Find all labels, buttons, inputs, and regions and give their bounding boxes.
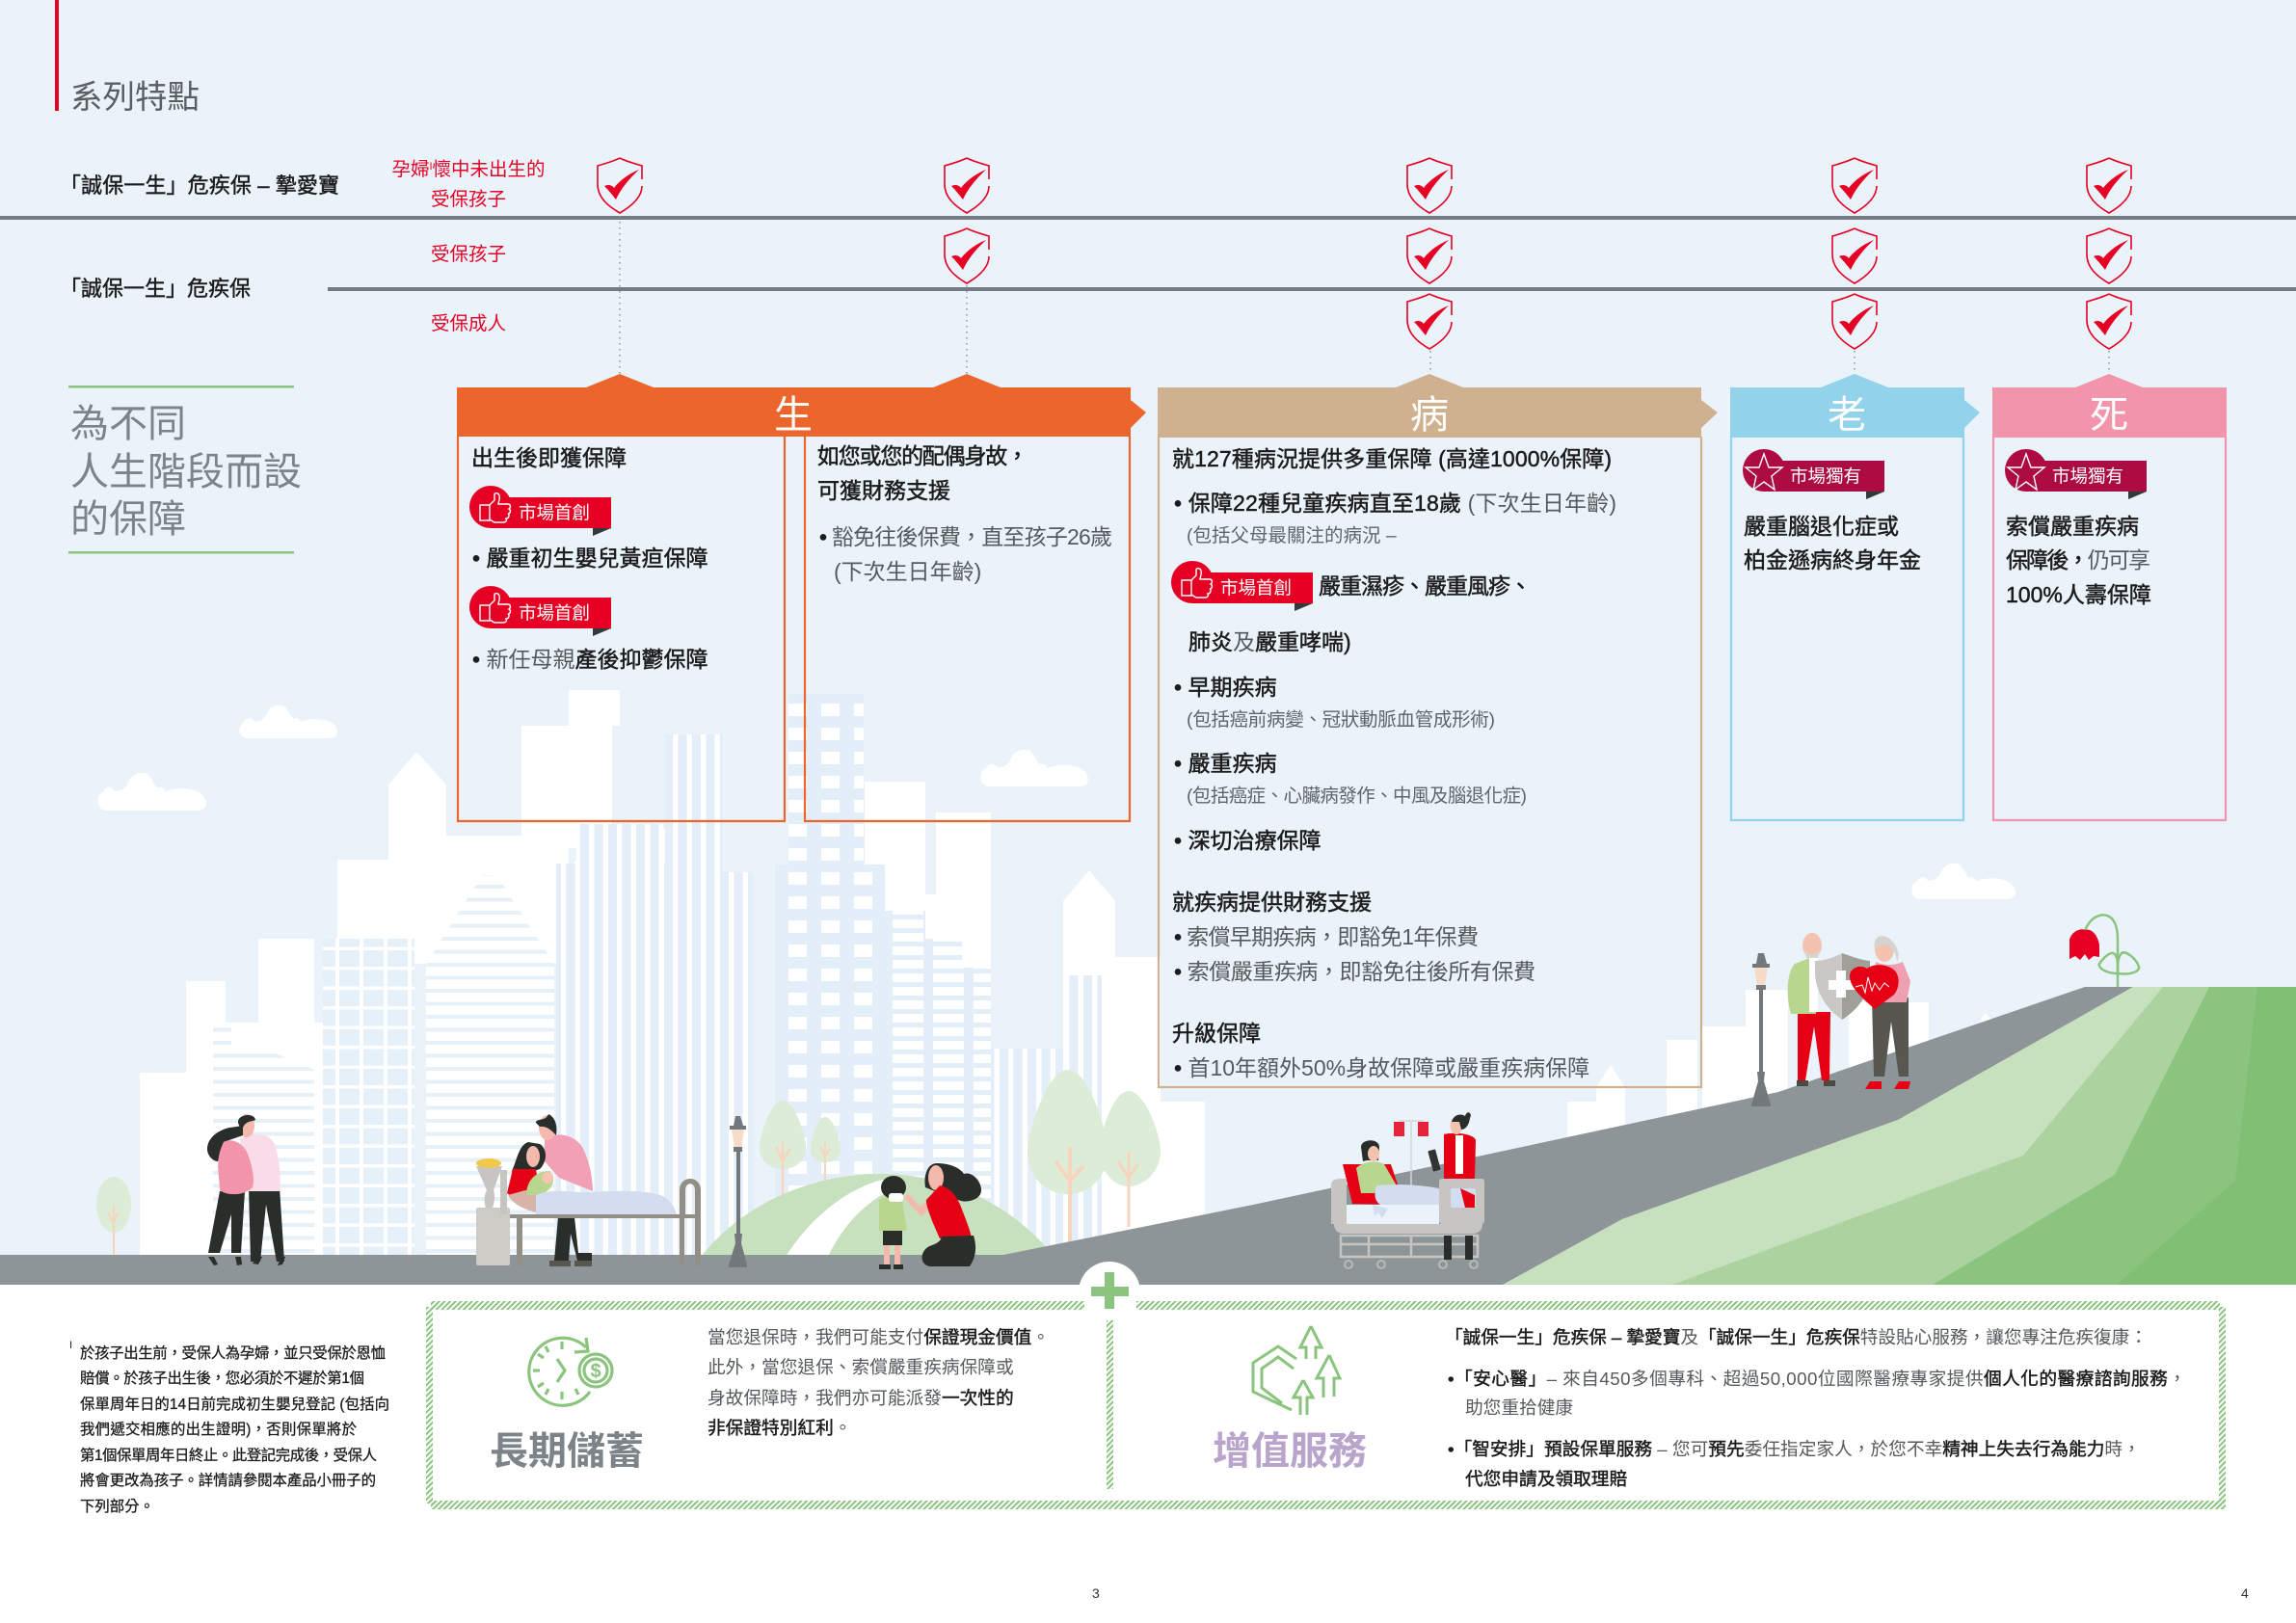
text: intensive care: • 深切治療保障 (1174, 828, 1321, 853)
green slopes (1503, 987, 2296, 1285)
text: savings description: 非保證特別紅利。 (707, 1418, 852, 1438)
badge: market exclusive: 市場獨有 (1790, 466, 1861, 486)
insured person labels: 受保成人 (431, 313, 506, 334)
text: services description: •「安心醫」– 來自450多個專科、超過50,000位國際醫療專家提供個人化的醫療諮詢服務， (1448, 1369, 2186, 1389)
text: services description: 代您申請及領取理賠 (1465, 1469, 1627, 1489)
badge: market first 3 (1171, 561, 1313, 611)
text: early illness: • 早期疾病 (1174, 675, 1276, 700)
left heading: life stages: 人生階段而設 (70, 451, 302, 493)
text: financial support: 可獲財務支援 (817, 478, 950, 503)
title: 系列特點 (70, 80, 200, 116)
text: pneumonia, asthma: 肺炎及嚴重哮喘) (1188, 629, 1351, 654)
text: savings description: 當您退保時，我們可能支付保證現金價值。 (707, 1327, 1050, 1347)
text: claim line 1: 索償嚴重疾病 (2006, 514, 2139, 539)
shield check icons (598, 158, 2131, 349)
timeline divider 2 (328, 287, 2296, 291)
text: parent death support: 如您或您的配偶身故， (817, 443, 1028, 468)
text: savings description (707, 1327, 1050, 1438)
footnote: 我們遞交相應的出生證明)，否則保單將於 (80, 1420, 357, 1438)
illustration: hospital bed with newborn (476, 1114, 701, 1266)
footnote: 下列部分。 (80, 1498, 154, 1515)
plan row label: 危疾保: 「誠保一生」危疾保 (60, 277, 251, 301)
text: services description: 助您重拾健康 (1465, 1397, 1573, 1418)
city skyline background (140, 690, 1995, 1255)
section title bar (55, 0, 59, 111)
panel: 病: 病 (1410, 394, 1449, 437)
text: claim line 2: 保障後，仍可享 (2006, 547, 2150, 572)
icon: clock and coin: $ (590, 1361, 601, 1382)
text: dementia annuity line 1: 嚴重腦退化症或 (1744, 514, 1899, 539)
illustration: patient in hospital bed with nurse (1331, 1112, 1484, 1268)
trees (96, 1070, 1161, 1255)
footnote: 將會更改為孩子。詳情請參閱本產品小冊子的 (80, 1472, 376, 1489)
footnote: 保單周年日的14日前完成初生嬰兒登記 (包括向 (80, 1396, 389, 1413)
clouds (97, 705, 2016, 899)
text: postpartum depression: • 新任母親產後抑鬱保障 (472, 647, 707, 672)
text: next birthday note: (下次生日年齡) (834, 559, 981, 584)
text: dementia annuity line 2: 柏金遜病終身年金 (1744, 547, 1921, 572)
illustration: expecting couple (207, 1114, 285, 1265)
text: waiver 1 year: • 索償早期疾病，即豁免1年保費 (1174, 924, 1479, 949)
panel: 死: 死 (2090, 394, 2128, 437)
timeline divider 1 (0, 216, 2296, 220)
text: parents' concern note: (包括父母最關注的病況 – (1187, 525, 1397, 546)
text: upgrade detail: • 首10年額外50%身故保障或嚴重疾病保障 (1174, 1055, 1589, 1080)
badge: market exclusive (1743, 449, 1884, 499)
badge: market first 2 (469, 586, 611, 636)
text: services description: •「智安排」預設保單服務 – 您可預先委任指定家人，於您不幸精神上失去行為能力時， (1448, 1439, 2141, 1459)
badge: market exclusive (2005, 449, 2147, 499)
text: premium waiver: • 豁免往後保費，直至孩子26歲 (819, 524, 1112, 549)
badge: market first 2: 市場首創 (519, 603, 590, 623)
panel: 生: 生 (774, 394, 813, 437)
plan row label: 摯愛寶: 「誠保一生」危疾保 – 摯愛寶 (60, 173, 339, 198)
insured person labels: 受保孩子 (431, 244, 506, 265)
road (0, 987, 2133, 1285)
badge: market first 3: 市場首創 (1220, 578, 1292, 598)
text: major illness note: (包括癌症、心臟病發作、中風及腦退化症) (1187, 785, 1527, 807)
text: upgrade heading: 升級保障 (1172, 1021, 1261, 1046)
text: neonatal jaundice: • 嚴重初生嬰兒黃疸保障 (472, 545, 707, 571)
badge: market first 1: 市場首創 (519, 503, 590, 522)
text: eczema, measles: 嚴重濕疹、嚴重風疹、 (1319, 573, 1532, 599)
left heading: life stages: 為不同 (70, 403, 186, 445)
text: waiver all: • 索償嚴重疾病，即豁免往後所有保費 (1174, 959, 1535, 984)
page number 4: 4 (2241, 1585, 2249, 1601)
badge: market first 1 (469, 486, 611, 536)
left heading: life stages: 的保障 (70, 498, 186, 541)
footnote: 賠償。於孩子出生後，您必須於不遲於第1個 (80, 1369, 364, 1387)
green hill (701, 1174, 1055, 1257)
text: 127 conditions: 就127種病況提供多重保障 (高達1000%保障) (1172, 446, 1612, 471)
text: services description: 「誠保一生」危疾保 – 摯愛寶及「誠保一生」危疾保特設貼心服務，讓您專注危疾復康： (1445, 1327, 2148, 1347)
illustration: mother and masked child (879, 1163, 981, 1269)
lamp post left (729, 1116, 747, 1267)
text: major illness: • 嚴重疾病 (1174, 751, 1276, 776)
dotted connector lines (620, 216, 2109, 374)
text: savings description: 此外，當您退保、索償嚴重疾病保障或 (707, 1357, 1014, 1377)
footnote: 於孩子出生前，受保人為孕婦，並只受保於恩恤 (80, 1344, 386, 1362)
text: claim line 3: 100%人壽保障 (2006, 582, 2151, 607)
page number 3: 3 (1092, 1585, 1100, 1601)
icon: shield with arrows (1253, 1326, 1340, 1415)
white footer area (0, 1285, 2296, 1623)
text: early illness note: (包括癌前病變、冠狀動脈血管成形術) (1187, 709, 1495, 731)
footnote (69, 1340, 389, 1515)
insured person labels: 懷中未出生的 (433, 159, 546, 180)
text: financial support heading: 就疾病提供財務支援 (1172, 890, 1372, 915)
panel: 生 (457, 374, 1146, 821)
panel: 病 (1158, 374, 1718, 1087)
insured person labels: 受保孩子 (431, 189, 506, 210)
text: birth cover heading: 出生後即獲保障 (471, 445, 627, 470)
insured person labels (391, 159, 546, 334)
text: 22 child illnesses: • 保障22種兒童疾病直至18歲 (下次生日年齡) (1174, 491, 1616, 516)
insured person labels: 孕婦 (391, 159, 429, 180)
left heading: life stages (68, 386, 302, 553)
text: savings description: 身故保障時，我們亦可能派發一次性的 (707, 1388, 1014, 1408)
heading: long-term savings: 長期儲蓄 (490, 1430, 644, 1473)
panel: 老: 老 (1828, 394, 1866, 437)
heading: value-added services: 增值服務 (1213, 1430, 1367, 1473)
panel: 死 (1992, 374, 2227, 820)
badge: market exclusive: 市場獨有 (2052, 466, 2123, 486)
footnote: 第1個保單周年日終止。此登記完成後，受保人 (80, 1446, 377, 1464)
footnote: I (69, 1340, 72, 1351)
text: services description (1445, 1327, 2186, 1489)
icon: clock and coin (529, 1338, 612, 1405)
illustration: drooping flower (2069, 915, 2139, 987)
panel: 老 (1730, 374, 1980, 820)
insured person labels: I (429, 161, 433, 173)
hatched frame (426, 1301, 2226, 1509)
plus badge (1079, 1262, 1140, 1313)
illustration: elderly couple with shield and heart (1788, 933, 1910, 1089)
lamp post right (1751, 953, 1771, 1106)
